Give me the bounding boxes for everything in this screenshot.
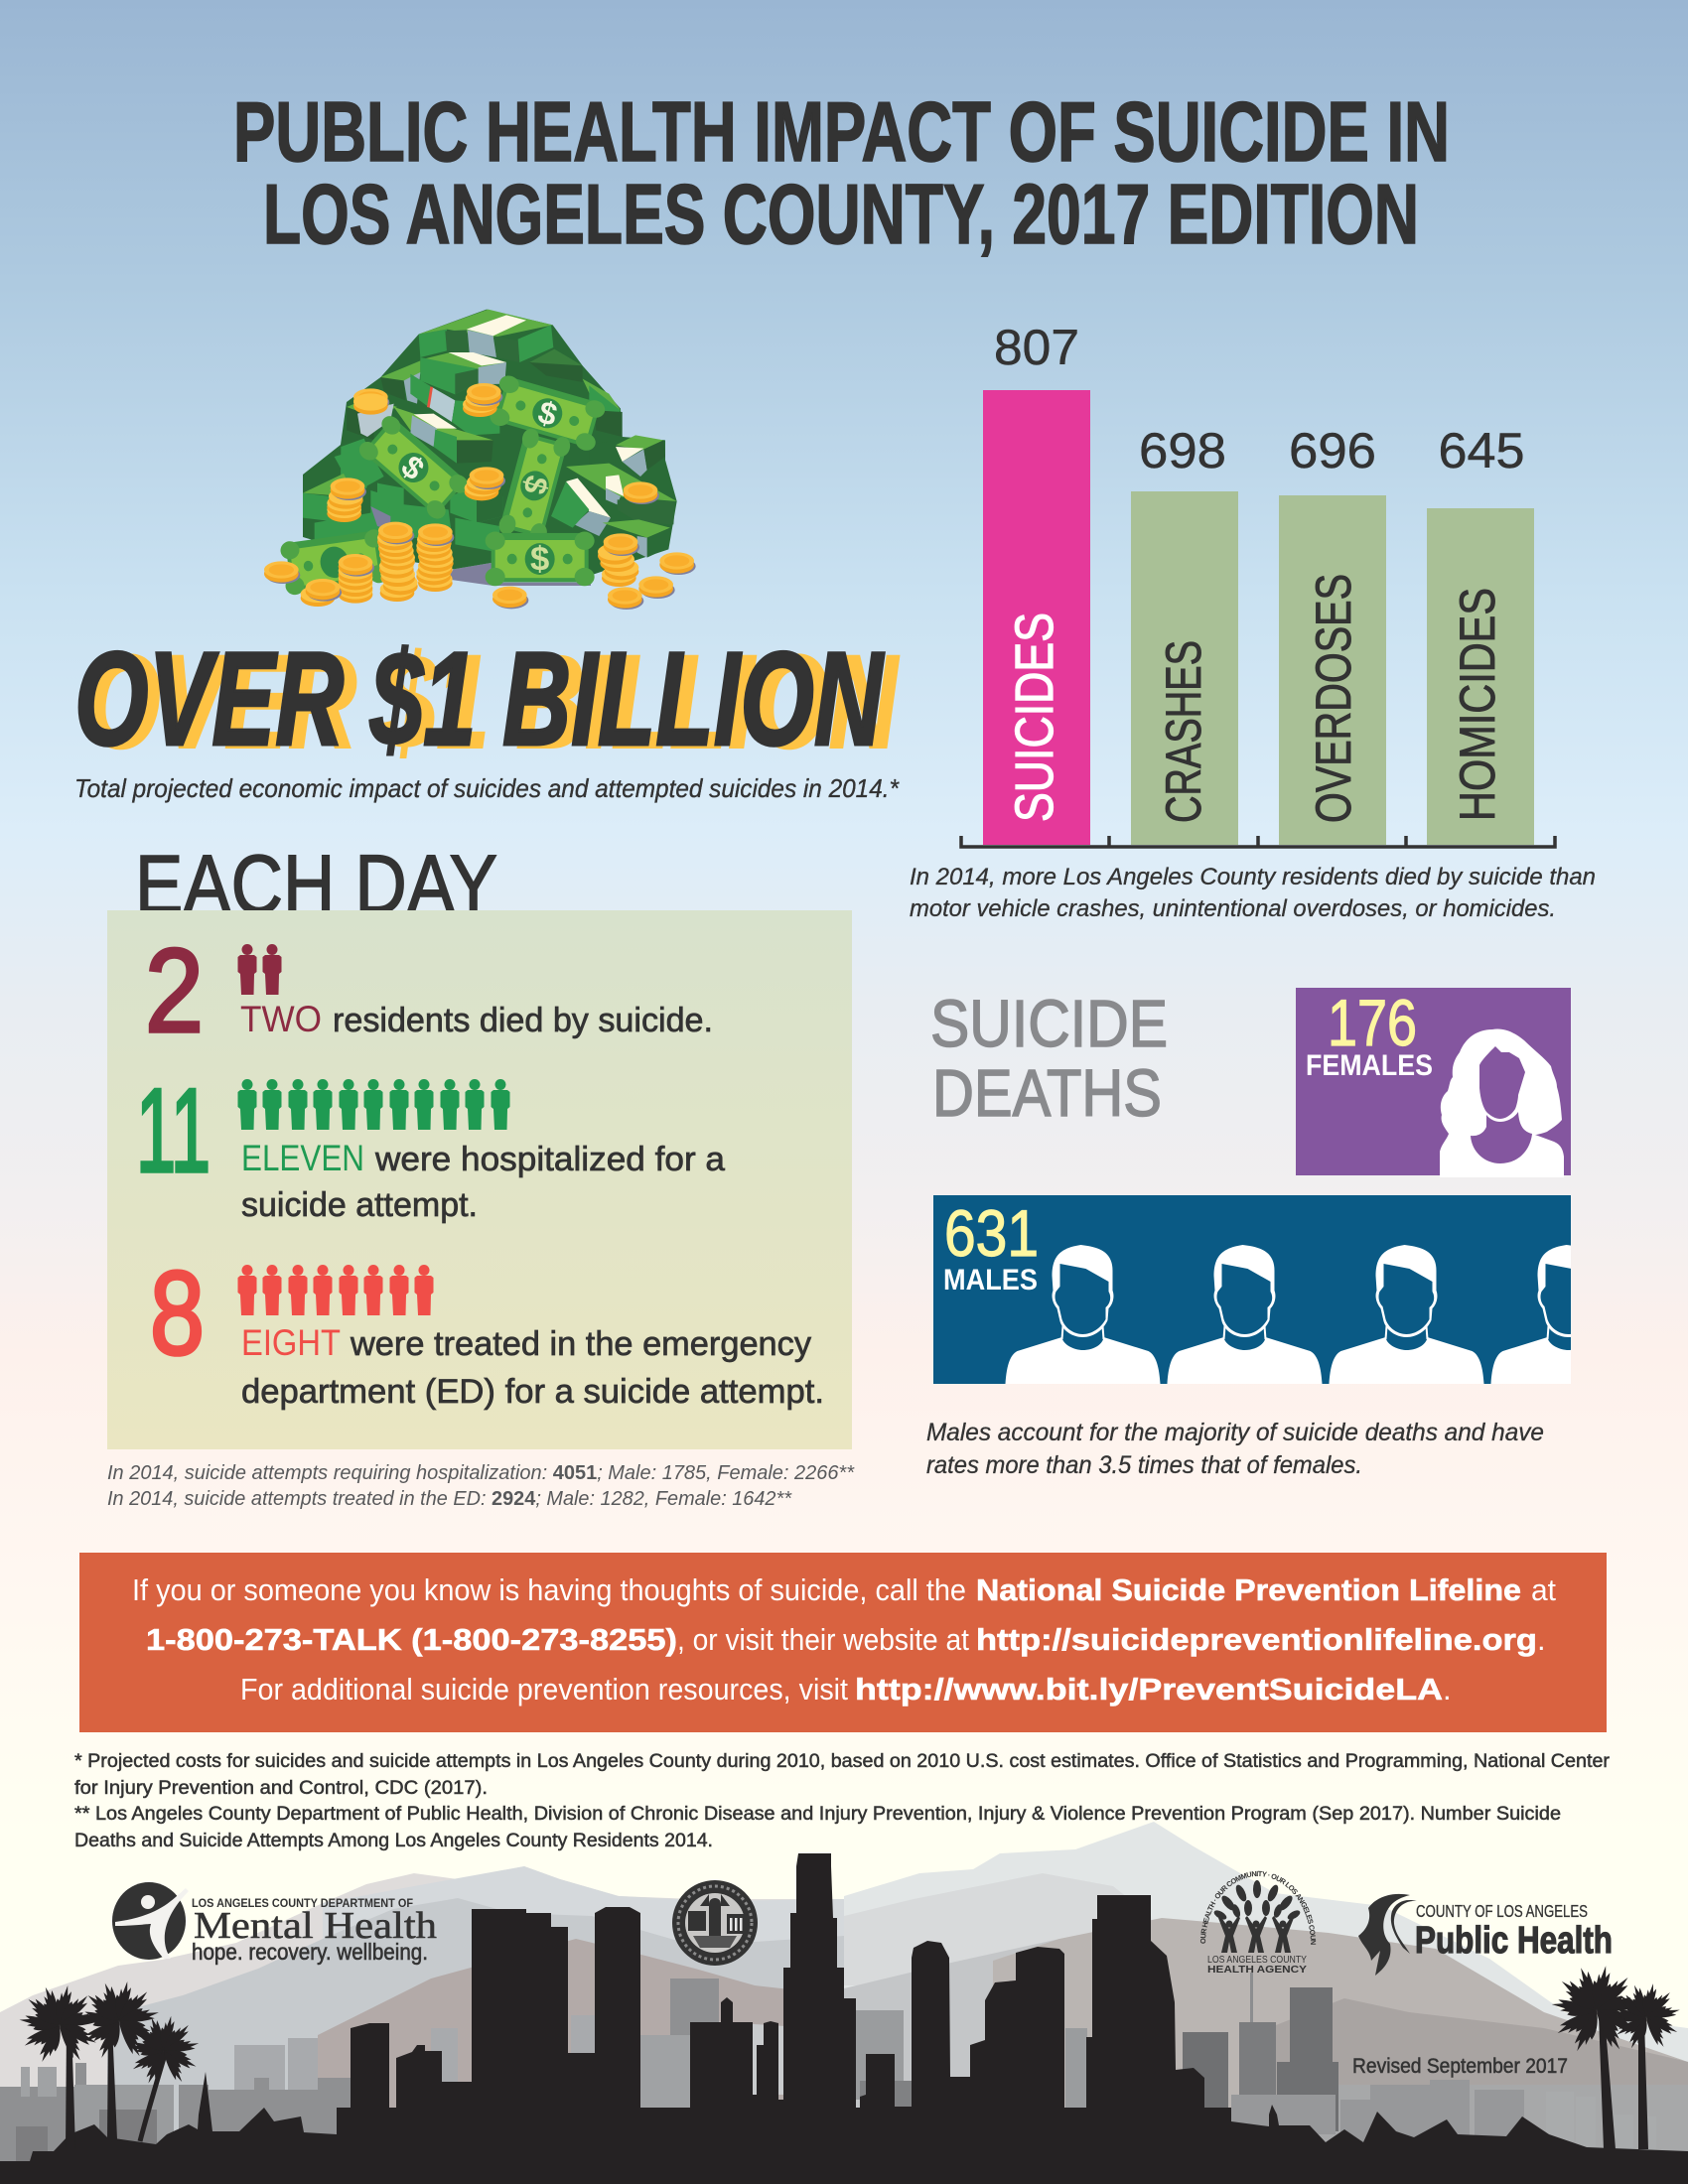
logo: health agency: LOS ANGELES COUNTY: [1207, 1954, 1307, 1966]
stat: eight treated in ED: department (ED) for a suicide attempt.: [241, 1373, 824, 1411]
stat: eight treated in ED: EIGHT: [241, 1322, 341, 1363]
bar: suicides: SUICIDES: [1005, 613, 1064, 822]
attempts note: In 2014, suicide attempts requiring hospitalization: 4051; Male: 1785, Female: 2266**: [107, 1462, 855, 1484]
panel: females: 176: [1328, 986, 1417, 1059]
bar: homicides: HOMICIDES: [1450, 588, 1505, 821]
panel: each day statistics: [107, 910, 852, 1449]
callout: lifeline: [79, 1553, 1607, 1732]
callout: lifeline: at: [1531, 1572, 1556, 1607]
icon: palm trees right: [1550, 1964, 1681, 2149]
panel: males: MALES: [943, 1264, 1038, 1297]
icon: palm trees left: [18, 1979, 200, 2149]
footnotes: [74, 1750, 1611, 1851]
logo: public health: COUNTY OF LOS ANGELES: [1416, 1901, 1588, 1921]
bar: homicides: [1427, 423, 1534, 845]
stat: eight treated in ED: 8: [150, 1247, 205, 1380]
logo: county seal: [672, 1880, 758, 1966]
heading: suicide deaths: SUICIDE: [930, 987, 1168, 1061]
heading: suicide deaths: [930, 987, 1168, 1131]
stat: two residents: [145, 924, 713, 1057]
callout: lifeline: , or visit their website at: [677, 1622, 969, 1657]
logo: public health: [1358, 1894, 1613, 1976]
bar: crashes: [1131, 423, 1238, 845]
title: [233, 85, 1450, 262]
right bundles: [616, 435, 663, 450]
heading: suicide deaths: DEATHS: [932, 1056, 1162, 1131]
footnotes: for Injury Prevention and Control, CDC (2017).: [74, 1777, 488, 1799]
callout: lifeline: National Suicide Prevention Lifeline: [976, 1572, 1521, 1607]
males caption: [926, 1419, 1544, 1479]
bar: overdoses: OVERDOSES: [1306, 574, 1361, 823]
left lower bundles: [450, 486, 503, 523]
callout: lifeline: http://www.bit.ly/PreventSuicideLA: [855, 1672, 1443, 1706]
logo: mental health: hope. recovery. wellbeing.: [192, 1939, 428, 1965]
stat: eight treated in ED: were treated in the emergency: [350, 1325, 811, 1363]
icons: male silhouettes: [1005, 1245, 1571, 1384]
callout: lifeline: .: [1537, 1622, 1546, 1657]
logo: mental health: LOS ANGELES COUNTY DEPARTMENT OF: [192, 1896, 413, 1910]
panel: females: FEMALES: [1306, 1049, 1433, 1082]
logo: mental health: [112, 1882, 437, 1965]
revision date: Revised September 2017: [1352, 2055, 1568, 2078]
bar chart caption: In 2014, more Los Angeles County residents died by suicide than: [910, 864, 1596, 890]
coin stacks: [353, 388, 389, 411]
stat: eleven hospitalized: [136, 1064, 725, 1224]
icon: female silhouette: [1440, 1029, 1564, 1177]
footnotes: * Projected costs for suicides and suicide attempts in Los Angeles County during 2010, based on 2010 U.S. cost estimates. Office of Statistics and Programming, National Center: [74, 1750, 1611, 1772]
callout: lifeline: .: [1443, 1672, 1452, 1706]
males caption: rates more than 3.5 times that of females.: [926, 1451, 1362, 1479]
logo: mental health: Mental Health: [194, 1905, 437, 1947]
panel: males: [933, 1195, 1571, 1384]
callout: lifeline: http://suicidepreventionlifeline.org: [976, 1622, 1537, 1657]
bar: overdoses: 696: [1289, 423, 1376, 478]
illustration: pile of money and coins: [264, 310, 696, 610]
callout: lifeline: For additional suicide prevention resources, visit: [240, 1672, 848, 1706]
bar: suicides: 807: [994, 320, 1079, 375]
headline: over one billion dollars: OVER $1 BILLION: [74, 625, 885, 773]
illustration: pile of money and coins: $: [516, 472, 555, 498]
second bundle: [380, 377, 405, 400]
bar chart caption: [910, 864, 1596, 922]
center-left bundle: [394, 407, 493, 454]
males caption: Males account for the majority of suicide deaths and have: [926, 1419, 1544, 1446]
top bundle: [419, 330, 447, 357]
bar chart: deaths by cause: [961, 320, 1555, 847]
skyline background: mountains and city: [0, 1822, 1688, 2184]
panel: males: 631: [944, 1196, 1039, 1270]
bar chart caption: motor vehicle crashes, unintentional overdoses, or homicides.: [910, 895, 1556, 922]
logo: public health: Public Health: [1415, 1920, 1613, 1962]
heading: each day: EACH DAY: [135, 838, 497, 931]
stat: eleven hospitalized: suicide attempt.: [241, 1186, 478, 1224]
stat: two residents: residents died by suicide.: [333, 1002, 713, 1039]
logo: health agency: OUR HEALTH · OUR COMMUNITY · OUR LOS ANGELES COUNTY: [1199, 1870, 1317, 1945]
back left stacks: [347, 397, 397, 417]
bar: crashes: 698: [1139, 423, 1226, 478]
attempts note: [107, 1462, 855, 1510]
stat: eleven hospitalized: 11: [136, 1064, 211, 1197]
stat: two residents: TWO: [240, 999, 322, 1039]
economic impact caption: Total projected economic impact of suicides and attempted suicides in 2014.*: [74, 773, 900, 803]
back right bundle: [529, 349, 583, 365]
footnotes: Deaths and Suicide Attempts Among Los Angeles County Residents 2014.: [74, 1830, 713, 1851]
stat: eleven hospitalized: ELEVEN: [241, 1138, 364, 1178]
callout: lifeline: 1-800-273-TALK (1-800-273-8255): [146, 1622, 677, 1657]
bills: $: [534, 394, 561, 433]
callout: lifeline: If you or someone you know is having thoughts of suicide, call the: [132, 1572, 966, 1607]
illustration: pile of money and coins: $: [394, 448, 431, 486]
bar: crashes: CRASHES: [1156, 640, 1211, 823]
footnotes: ** Los Angeles County Department of Public Health, Division of Chronic Disease and Injury Prevention, Injury & Violence Prevention Program (Sep 2017). Number Suicide: [74, 1803, 1561, 1825]
panel: females: [1296, 986, 1571, 1177]
logo: health agency: HEALTH AGENCY: [1207, 1964, 1307, 1976]
stat: two residents: 2: [145, 924, 204, 1057]
stat: eight treated in ED: [150, 1247, 824, 1411]
bar: suicides: [983, 320, 1090, 845]
bar: overdoses: [1279, 423, 1386, 845]
bills: [488, 373, 607, 453]
stat: eleven hospitalized: were hospitalized for a: [374, 1141, 725, 1178]
logo: health agency: [1199, 1870, 1317, 1976]
skyline foreground silhouette: [0, 1853, 1688, 2184]
attempts note: In 2014, suicide attempts treated in the ED: 2924; Male: 1282, Female: 1642**: [107, 1488, 792, 1510]
headline: over one billion dollars: OVER $1 BILLION: [86, 628, 900, 776]
bar: homicides: 645: [1438, 423, 1525, 478]
illustration: pile of money and coins: $: [530, 541, 549, 579]
